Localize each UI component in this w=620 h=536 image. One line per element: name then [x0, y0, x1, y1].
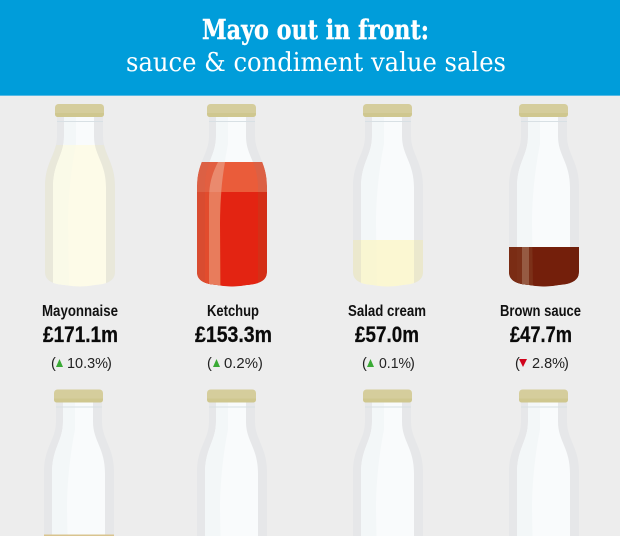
label: ketchup: £153.3m: [195, 322, 272, 347]
label: salad cream: Salad cream: [348, 303, 426, 320]
label: ketchup: [195, 303, 272, 372]
header banner: [0, 0, 620, 96]
label: ketchup: ): [258, 356, 263, 372]
label: ketchup: Ketchup: [207, 303, 259, 320]
label: brown sauce: (: [515, 356, 520, 372]
title: Mayo out in front:: [202, 15, 429, 46]
label: salad cream: 0.1%: [379, 356, 411, 372]
label: brown sauce: Brown sauce: [500, 303, 581, 320]
label: mayonnaise: 10.3%: [67, 356, 108, 372]
bottle: second row 4: [509, 390, 579, 536]
label: brown sauce: [500, 303, 581, 372]
label: brown sauce: ): [564, 356, 569, 372]
label: salad cream: (: [362, 356, 367, 372]
bottle: salad cream: [353, 104, 423, 288]
bottle: brown sauce: [509, 104, 579, 288]
label: mayonnaise: [42, 303, 118, 372]
title: sauce & condiment value sales: [126, 48, 506, 78]
label: ketchup: 0.2%: [224, 356, 258, 372]
label: mayonnaise: Mayonnaise: [42, 303, 118, 320]
label: salad cream: ): [410, 356, 415, 372]
label: brown sauce: 2.8%: [532, 356, 565, 372]
bottle: second row 2: [197, 390, 267, 536]
label: mayonnaise: ): [107, 356, 112, 372]
bottle: second row 3: [353, 390, 423, 536]
label: mayonnaise: (: [51, 356, 56, 372]
label: mayonnaise: £171.1m: [43, 322, 118, 347]
label: salad cream: £57.0m: [355, 322, 419, 347]
bottle: mayonnaise: [45, 104, 115, 288]
title: [126, 15, 506, 78]
label: brown sauce: £47.7m: [510, 322, 572, 347]
label: ketchup: (: [207, 356, 212, 372]
label: salad cream: [348, 303, 426, 372]
bottle: ketchup: [197, 104, 267, 288]
bottle: second row 1: [44, 390, 114, 536]
